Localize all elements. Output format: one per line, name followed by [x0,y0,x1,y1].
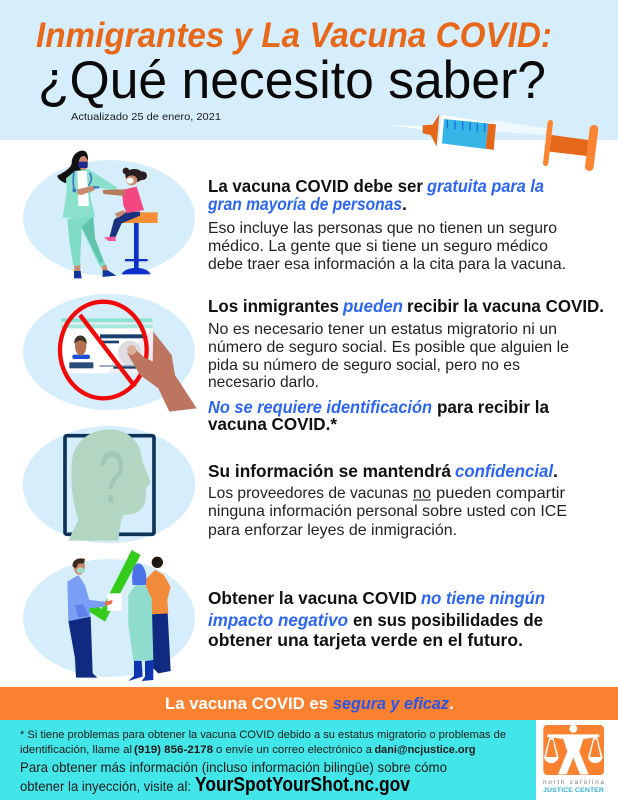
orange banner: . [449,694,454,713]
text block: confidentiality: Los proveedores de vacunas [208,485,408,502]
footnote text: o envíe un correo electrónico a [216,744,373,756]
logo: North Carolina Justice Center [536,720,618,800]
footnote text [20,729,506,756]
text block: confidentiality: confidencial [455,461,554,481]
title: orange line: Inmigrantes y La Vacuna COVID: [36,16,552,55]
illustration: anonymous head silhouette [23,426,195,543]
text block: no negative impact on green card: en sus posibilidades de [353,610,543,630]
text block: no negative impact on green card: Obtener la vacuna COVID [208,588,417,608]
text block: confidentiality: Su información se mantendrá [208,461,451,481]
text block: free vaccine: médico. La gente que si tiene un seguro médico [208,238,548,255]
orange banner [0,687,618,720]
illustration: crossed-out ID card [23,294,197,412]
title: black line: ¿Qué necesito saber? [38,51,546,110]
text block: immigrants can receive the vaccine: número de seguro social. Es posible que alguien le [208,339,569,356]
text block: confidentiality: no [413,485,431,502]
footnote text: * Si tiene problemas para obtener la vacuna COVID debido a su estatus migratorio o problemas de [20,729,506,741]
text block: immigrants can receive the vaccine: vacuna COVID.* [208,414,337,434]
illustration: three people with green check [23,550,195,681]
text block: free vaccine: La vacuna COVID debe ser [208,176,423,196]
footnote text: dani@ncjustice.org [374,744,476,756]
text block: free vaccine: . [402,194,407,214]
footer panel [0,720,618,800]
illustration: anonymous head silhouette: ? [99,436,125,518]
more information text [20,759,447,796]
more information text: obtener la inyección, visite al: [20,778,191,794]
text block: immigrants can receive the vaccine: No es necesario tener un estatus migratorio ni un [208,321,557,338]
text block: immigrants can receive the vaccine: necesario darlo. [208,374,319,391]
text block: immigrants can receive the vaccine: No se requiere identificación [208,397,432,417]
text block: confidentiality: para enforzar leyes de inmigración. [208,522,457,539]
text block: immigrants can receive the vaccine: pida su número de seguro social, pero no es [208,357,520,374]
text block: confidentiality [208,461,567,539]
text block: confidentiality: ninguna información personal sobre usted con ICE [208,503,567,520]
text block: free vaccine: gran mayoría de personas [207,194,402,214]
logo: North Carolina Justice Center: north carolina [543,779,604,786]
text block: free vaccine [207,176,566,273]
icon: syringe [387,114,594,167]
text block: no negative impact on green card: impacto negativo [208,610,348,630]
text block: confidentiality: pueden compartir [436,485,566,502]
text block: no negative impact on green card: no tiene ningún [421,588,545,608]
update date: Actualizado 25 de enero, 2021 [71,111,221,123]
orange banner: segura y eficaz [333,694,449,713]
text block: no negative impact on green card: obtener una tarjeta verde en el futuro. [208,630,523,650]
more information text: Para obtener más información (incluso información bilingüe) sobre cómo [20,759,447,775]
header band [0,0,618,140]
illustration: nurse vaccinating child [23,151,195,278]
text block: free vaccine: debe traer esa información a la cita para la vacuna. [208,256,566,273]
footnote text: identificación, llame al [20,744,132,756]
logo: North Carolina Justice Center: JUSTICE CENTER [543,787,604,794]
text block: free vaccine: gratuita para la [426,176,544,196]
text block: immigrants can receive the vaccine [208,296,604,434]
text block: no negative impact on green card [208,588,545,650]
footnote text: (919) 856-2178 [134,744,213,756]
text block: immigrants can receive the vaccine: pueden [342,296,403,316]
orange banner: La vacuna COVID es [165,694,328,713]
text block: free vaccine: Eso incluye las personas que no tienen un seguro [208,220,557,237]
text block: immigrants can receive the vaccine: para recibir la [437,397,549,417]
text block: immigrants can receive the vaccine: recibir la vacuna COVID. [407,296,604,316]
text block: immigrants can receive the vaccine: Los inmigrantes [208,296,339,316]
text block: confidentiality: . [553,461,558,481]
more information text: YourSpotYourShot.nc.gov [195,774,411,796]
